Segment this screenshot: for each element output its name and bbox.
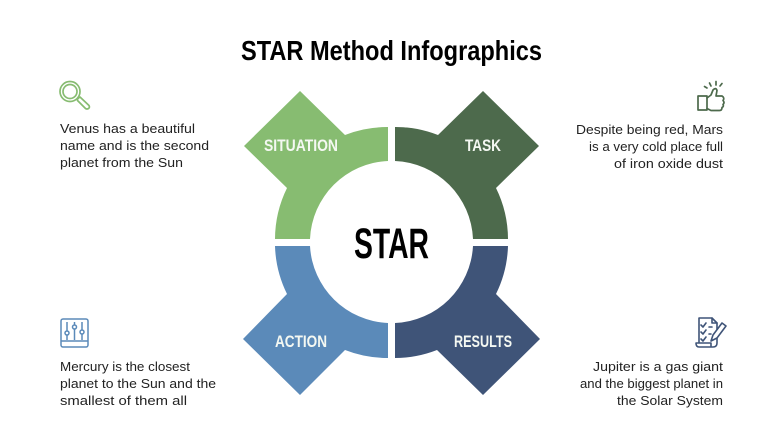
text block: results: the Solar System [617,393,723,408]
text block: task: is a very cold place full [589,139,723,154]
text block: action: smallest of them all [60,393,187,408]
text block: action [60,359,216,408]
text block: task [576,122,723,171]
icon: thumbs up [698,82,724,110]
text block: results [580,359,723,408]
center label: STAR [354,220,429,268]
title: STAR Method Infographics [241,35,542,66]
panel: results: RESULTS [454,332,512,351]
panel: situation: SITUATION [264,136,338,155]
panel: results [395,246,540,395]
panel: task [395,91,539,239]
text block: situation: Venus has a beautiful [60,121,195,136]
icon: magnifying glass [60,82,89,109]
text block: task: Despite being red, Mars [576,122,723,137]
text block: situation: planet from the Sun [60,155,183,170]
icon: sliders panel [61,319,88,347]
icon: checklist and pen [696,318,726,347]
text block: task: of iron oxide dust [614,156,723,171]
panel: task: TASK [465,136,502,155]
text block: situation [60,121,209,170]
text block: action: planet to the Sun and the [60,376,216,391]
panel: action [243,246,388,395]
text block: situation: name and is the second [60,138,209,153]
central STAR diagram [243,91,540,395]
panel: situation [244,91,388,239]
text block: results: and the biggest planet in [580,376,723,391]
text block: action: Mercury is the closest [60,359,190,374]
panel: action: ACTION [275,332,327,351]
text block: results: Jupiter is a gas giant [593,359,723,374]
